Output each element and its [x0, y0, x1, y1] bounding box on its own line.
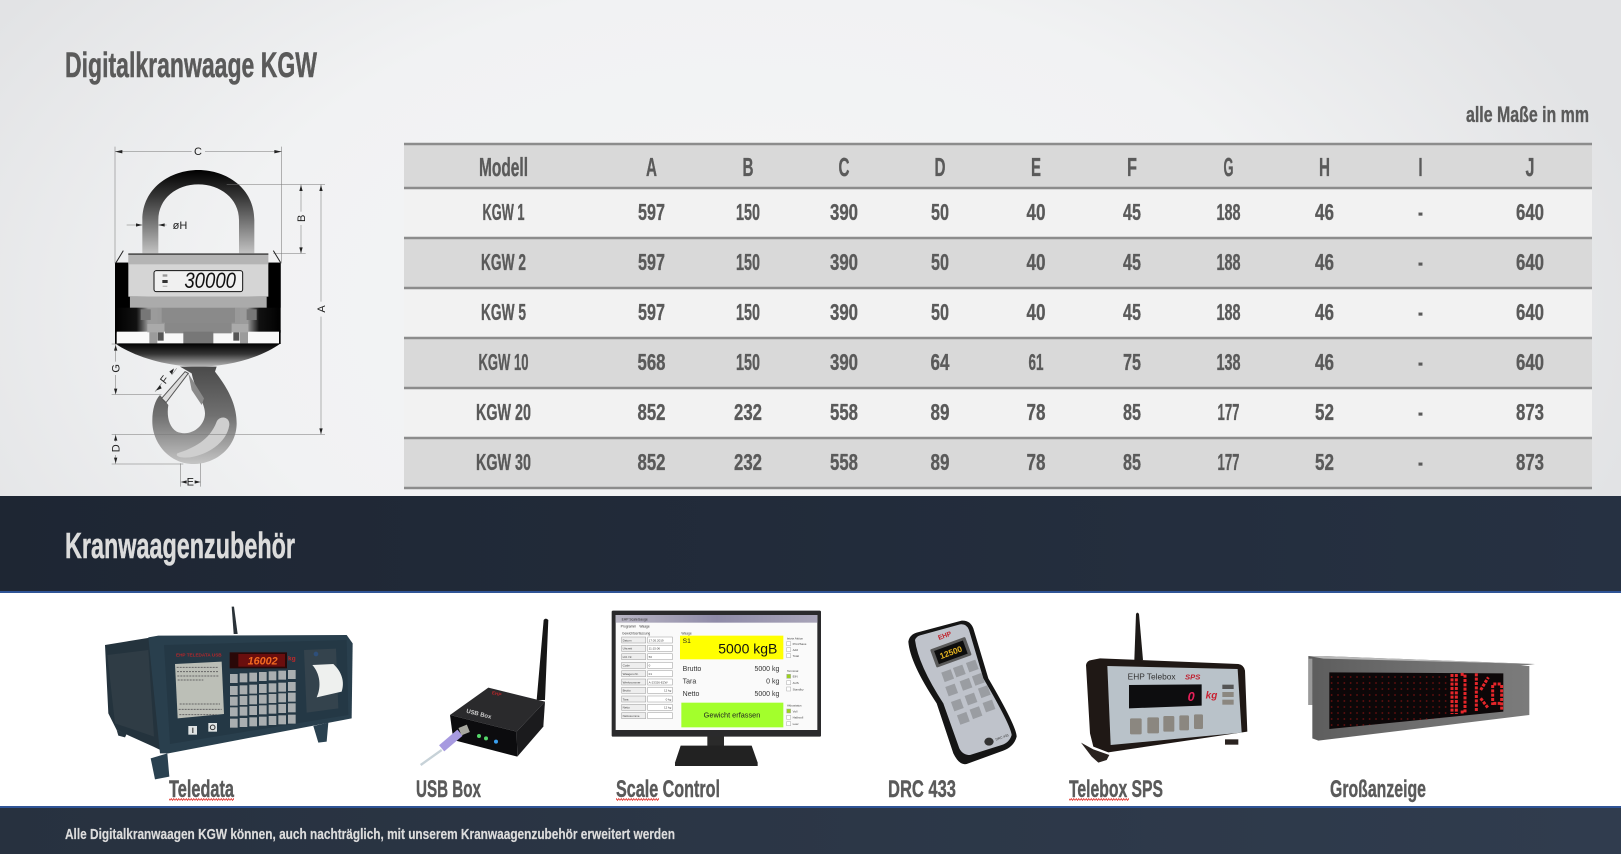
left form labels: Nettosumme: [623, 714, 640, 718]
dimension labels: B: [296, 215, 308, 222]
row KGW 10: [478, 349, 1544, 375]
row KGW 10: -: [1418, 349, 1423, 375]
row KGW 20: 558: [830, 399, 858, 425]
dimension lines: [112, 147, 325, 487]
box: [450, 688, 545, 757]
heading: EHP Telebox: [1128, 671, 1176, 681]
row KGW 20: 177: [1218, 399, 1240, 425]
row KGW 2: 390: [830, 249, 858, 275]
title: Digitalkranwaage KGW: [65, 46, 317, 85]
dimension labels: [111, 146, 328, 489]
row KGW 5: [481, 299, 1544, 325]
right status labels: Leer: [793, 722, 799, 726]
monitor frame: [612, 611, 821, 737]
section band: accessories heading: [0, 496, 1621, 593]
dimension arrows: [114, 150, 323, 484]
software screen: Waage: [639, 624, 650, 628]
row KGW 5: 150: [736, 299, 760, 325]
row KGW 10: 640: [1516, 349, 1544, 375]
row KGW 10: 138: [1216, 349, 1241, 375]
row KGW 5: 390: [830, 299, 858, 325]
display: kg: [1206, 690, 1217, 701]
software screen: Gewichtserfassung: [622, 631, 650, 635]
software screen: Waage: [681, 631, 692, 635]
row KGW 30: 85: [1123, 449, 1141, 475]
right status labels: Total: [793, 654, 799, 658]
heading: SPS: [1185, 672, 1201, 681]
row KGW 1: KGW 1: [482, 199, 525, 225]
left form labels: 01: [649, 672, 652, 676]
left form labels: 17.05.2019: [649, 638, 664, 642]
right status labels: Akkustatus: [787, 704, 802, 708]
row KGW 1: 46: [1315, 199, 1334, 225]
table header: Modell: [479, 152, 528, 182]
row KGW 1: 45: [1123, 199, 1141, 225]
label: DRC 433: DRC 433: [888, 776, 956, 803]
right status labels: Terminal: [787, 669, 799, 673]
LCD screen: [175, 662, 224, 718]
LED display: [230, 652, 296, 668]
left form labels: Uhrzeit: [623, 647, 632, 651]
label: Teledata: Teledata: [169, 776, 234, 803]
row KGW 20: 85: [1123, 399, 1141, 425]
row KGW 20: [476, 399, 1544, 425]
table header: G: [1224, 152, 1234, 182]
row KGW 5: 640: [1516, 299, 1544, 325]
capture button: [681, 703, 783, 727]
dimension labels: A: [316, 305, 328, 313]
left form labels: Lfd. Nr.: [623, 655, 632, 659]
product: Großanzeige LED display: [1308, 656, 1535, 741]
handheld body: [908, 621, 1017, 764]
values: 5000 kg: [754, 666, 779, 673]
left form labels: 0: [649, 664, 651, 668]
row KGW 30: 873: [1516, 449, 1544, 475]
left form labels: Brutto: [623, 689, 631, 693]
left form labels: Datum: [623, 638, 632, 642]
row KGW 5: 597: [638, 299, 665, 325]
display housing: [128, 253, 268, 308]
label: Teledata: [169, 776, 234, 803]
table header: J: [1526, 152, 1534, 182]
row KGW 5: -: [1418, 299, 1423, 325]
antenna: [537, 619, 548, 700]
row KGW 10: 46: [1315, 349, 1334, 375]
row KGW 2: 597: [638, 249, 665, 275]
antenna: [232, 607, 238, 634]
table header: D: [934, 152, 946, 182]
row KGW 10: 150: [736, 349, 760, 375]
accessories panel background: [0, 593, 1621, 806]
row KGW 2: KGW 2: [481, 249, 526, 275]
row KGW 30: -: [1418, 449, 1423, 475]
product: Telebox SPS: [1081, 613, 1247, 763]
row KGW 10: 64: [930, 349, 950, 375]
table header: B: [742, 152, 754, 182]
keys: [1130, 685, 1234, 734]
label: Scale Control: [616, 776, 720, 803]
row KGW 20: 89: [930, 399, 950, 425]
faceplate: [1107, 666, 1242, 745]
row KGW 2: 40: [1026, 249, 1046, 275]
LED display: kg: [288, 656, 296, 663]
keypad: [230, 670, 296, 728]
row KGW 5: KGW 5: [481, 299, 526, 325]
values: [683, 666, 779, 698]
LEDs: [477, 734, 498, 744]
left form labels: 12 kg: [664, 706, 672, 710]
product: Scale Control monitor: [612, 611, 821, 766]
row KGW 2: 188: [1216, 249, 1241, 275]
screen: 12500: [938, 644, 964, 661]
row KGW 5: 46: [1315, 299, 1334, 325]
screen: [930, 637, 972, 668]
row KGW 30: 89: [930, 449, 950, 475]
row KGW 10: KGW 10: [478, 349, 528, 375]
right status labels: Voll: [793, 709, 798, 713]
product: USB Box: [421, 619, 548, 765]
technical drawing: crane scale with dimensions: [111, 146, 328, 489]
row KGW 1: 150: [736, 199, 760, 225]
row KGW 1: 40: [1026, 199, 1046, 225]
row KGW 10: 75: [1123, 349, 1141, 375]
left form labels: 0 kg: [666, 697, 672, 701]
values: 0 kg: [766, 678, 779, 685]
row KGW 20: 78: [1026, 399, 1046, 425]
dimension labels: G: [111, 364, 123, 373]
weight readout: S1: [683, 638, 691, 645]
power buttons: [188, 723, 217, 735]
left form: [622, 637, 672, 719]
row KGW 2: [481, 249, 1544, 275]
row KGW 30: 177: [1218, 449, 1240, 475]
table header: H: [1319, 152, 1330, 182]
row KGW 30: 52: [1315, 449, 1334, 475]
keys: [941, 660, 995, 725]
housing: [1308, 656, 1535, 741]
left form labels: Netto: [623, 706, 630, 710]
section band: accessories heading: Kranwaagenzubehör: [65, 525, 295, 566]
row KGW 2: 640: [1516, 249, 1544, 275]
heading: [1128, 671, 1201, 681]
row KGW 20: 52: [1315, 399, 1334, 425]
software screen: Programm: [621, 624, 636, 628]
row KGW 30: 78: [1026, 449, 1046, 475]
label: Großanzeige: Großanzeige: [1330, 776, 1426, 803]
dimension labels: C: [194, 146, 202, 158]
row KGW 5: 45: [1123, 299, 1141, 325]
dimension labels: E: [187, 477, 194, 489]
right status boxes: [787, 642, 791, 726]
lower dome: [115, 343, 281, 367]
software screen: [616, 615, 817, 730]
dimension labels: F: [158, 374, 172, 386]
shackle: [142, 170, 254, 254]
row KGW 1: 188: [1216, 199, 1241, 225]
row KGW 30: KGW 30: [476, 449, 531, 475]
weight readout: 5000 kgB: [718, 641, 777, 657]
right status labels: Print/Save: [793, 642, 807, 646]
row KGW 20: KGW 20: [476, 399, 531, 425]
dimensions table: [404, 144, 1592, 488]
row KGW 20: 873: [1516, 399, 1544, 425]
values: Tara: [683, 678, 696, 685]
row KGW 30: 852: [638, 449, 666, 475]
left form labels: A-23326-EZW: [649, 680, 668, 684]
right status labels: Standby: [793, 687, 804, 691]
row KGW 2: 150: [736, 249, 760, 275]
row KGW 20: 232: [734, 399, 762, 425]
row KGW 5: 40: [1026, 299, 1046, 325]
LED display: 16002: [248, 656, 278, 668]
monitor stand: [675, 736, 758, 766]
table header: I: [1418, 152, 1422, 182]
weight readout: [680, 636, 783, 659]
right status labels: Add: [793, 648, 798, 652]
row KGW 5: 50: [931, 299, 949, 325]
footer band with note: [0, 806, 1621, 854]
right status labels: EIN: [793, 675, 798, 679]
faceplate: [915, 624, 1012, 755]
values: 5000 kg: [754, 691, 779, 698]
housing: [105, 635, 353, 779]
row KGW 20: 852: [638, 399, 666, 425]
values: Netto: [683, 691, 699, 698]
hook: [152, 367, 237, 464]
left form labels: 11:15:06: [649, 647, 660, 651]
row KGW 10: 61: [1028, 349, 1044, 375]
feet: [1081, 739, 1238, 763]
housing: [1086, 658, 1247, 752]
display: [1129, 684, 1217, 708]
row KGW 30: 232: [734, 449, 762, 475]
row KGW 2: 46: [1315, 249, 1334, 275]
values: Brutto: [683, 666, 701, 673]
LED matrix: [1329, 672, 1503, 729]
background: upper section: [0, 0, 1621, 496]
logo: [984, 733, 1009, 746]
label: Scale Control: Scale Control: [616, 776, 720, 803]
right status labels: letzte Aktion: [787, 636, 803, 640]
capture button: Gewicht erfassen: [704, 711, 760, 720]
table header: C: [838, 152, 850, 182]
display housing: 30000: [184, 268, 237, 293]
row KGW 2: 50: [931, 249, 949, 275]
right status labels: Halbvoll: [793, 716, 804, 720]
table header: [479, 152, 1534, 182]
left form labels: 12 kg: [664, 689, 672, 693]
row KGW 1: [482, 199, 1544, 225]
table row backgrounds: [404, 144, 1592, 488]
printer: [304, 649, 343, 713]
product: DRC 433 handheld: [908, 621, 1017, 764]
left form labels: 50: [649, 655, 652, 659]
lit characters 0 kg: [1452, 673, 1502, 714]
row KGW 1: 50: [931, 199, 949, 225]
scale body: [115, 263, 281, 344]
box: EHP: [491, 690, 502, 697]
row KGW 2: -: [1418, 249, 1423, 275]
left form labels: Werknummer: [623, 680, 641, 684]
table header: F: [1127, 152, 1137, 182]
dimension labels: øH: [173, 220, 187, 232]
row KGW 30: 558: [830, 449, 858, 475]
antenna: [1134, 613, 1143, 660]
footer band with note: Alle Digitalkranwaagen KGW können, auch nachträglich, mit unserem Kranwaagenzubehör erweitert werden: [65, 826, 675, 843]
row KGW 5: 188: [1216, 299, 1241, 325]
red brand label: EHP TELEDATA USB: [176, 653, 222, 658]
table header: A: [646, 152, 657, 182]
right status labels: AUS: [793, 681, 799, 685]
USB cable: [421, 728, 468, 765]
product: Teledata: [105, 607, 353, 779]
row KGW 30: [476, 449, 1544, 475]
row KGW 20: -: [1418, 399, 1423, 425]
label: Telebox SPS: Telebox SPS: [1069, 776, 1163, 803]
row KGW 1: 597: [638, 199, 665, 225]
right status labels: [787, 636, 807, 726]
logo: DRC 433: [995, 733, 1009, 742]
display: 0: [1188, 690, 1195, 704]
label: Telebox SPS: [1069, 776, 1163, 803]
box: USB Box: [466, 709, 492, 721]
dimension labels: D: [111, 444, 123, 452]
left form labels: [623, 638, 672, 718]
label: USB Box: USB Box: [416, 776, 481, 803]
left form labels: Tara: [623, 697, 629, 701]
row KGW 2: 45: [1123, 249, 1141, 275]
row KGW 1: 640: [1516, 199, 1544, 225]
row KGW 10: 390: [830, 349, 858, 375]
row KGW 1: -: [1418, 199, 1423, 225]
table header: E: [1031, 152, 1041, 182]
left form labels: Waagen-Nr.: [623, 672, 639, 676]
software screen: EHP ScaleGauge: [622, 618, 648, 622]
row KGW 1: 390: [830, 199, 858, 225]
brand: EHP: [937, 630, 953, 642]
row KGW 10: 568: [638, 349, 666, 375]
left form labels: Code: [623, 664, 630, 668]
